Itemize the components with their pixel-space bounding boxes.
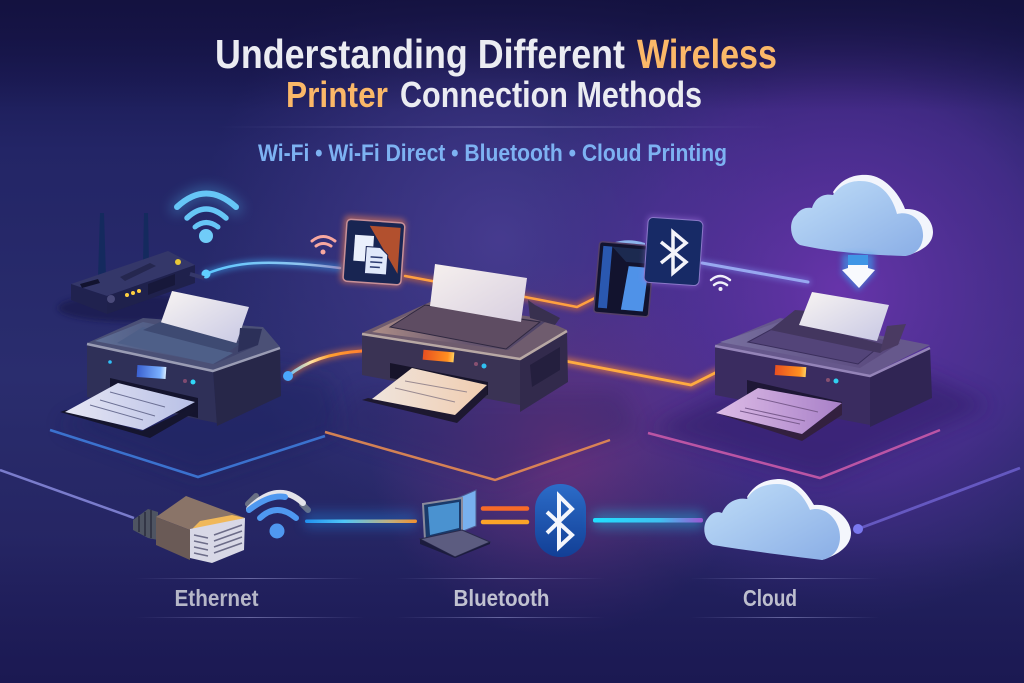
printer: middle Wi-Fi Direct — [362, 264, 568, 423]
connection line: Bluetooth icon to cloud — [702, 263, 808, 282]
label: Ethernet: Ethernet — [174, 585, 259, 611]
bottom line: Bluetooth to cloud — [593, 512, 703, 528]
title: Printer — [286, 74, 388, 115]
icon: Wi-Fi signal pink — [312, 236, 335, 254]
bottom line: Wi-Fi to laptop — [305, 512, 417, 528]
title — [215, 31, 777, 115]
printer: right cloud — [715, 292, 932, 441]
connection line: router to Wi-Fi Direct icon — [202, 263, 340, 278]
icon: bottom cloud — [704, 479, 851, 560]
floor connection lines — [50, 430, 940, 480]
icon: Wi-Fi signal white — [711, 276, 730, 291]
icon: top cloud — [791, 175, 933, 256]
icon: paired orange lines — [483, 508, 527, 522]
connection line: printer one to printer two — [283, 351, 362, 381]
icon: down arrow — [840, 254, 876, 291]
icon: Bluetooth badge — [535, 484, 586, 557]
title: Understanding Different — [215, 31, 625, 77]
icon: Wi-Fi signal bottom — [248, 493, 308, 538]
title: Connection Methods — [400, 74, 702, 115]
subtitle: Wi-Fi • Wi-Fi Direct • Bluetooth • Cloud Printing — [258, 140, 727, 167]
connection line: orange upper — [405, 276, 595, 307]
icon: Wi-Fi Direct document tile — [340, 215, 406, 287]
bottom line: left to Ethernet — [0, 470, 134, 518]
connection line: printer two to printer three — [565, 361, 717, 385]
icon: laptop and folder — [420, 490, 490, 558]
icon: Bluetooth tile — [643, 215, 703, 287]
icon: Wi-Fi signal blue — [177, 193, 236, 243]
bottom line: cloud to right edge — [853, 468, 1020, 534]
icon: tablet with blue dome — [594, 240, 655, 317]
label: Cloud: Cloud — [743, 585, 797, 611]
label: Bluetooth: Bluetooth — [454, 585, 550, 611]
icon: router — [58, 213, 204, 322]
icon: Ethernet plug — [133, 496, 245, 563]
title: Wireless — [637, 31, 777, 77]
printer: left Wi-Fi — [60, 291, 281, 438]
